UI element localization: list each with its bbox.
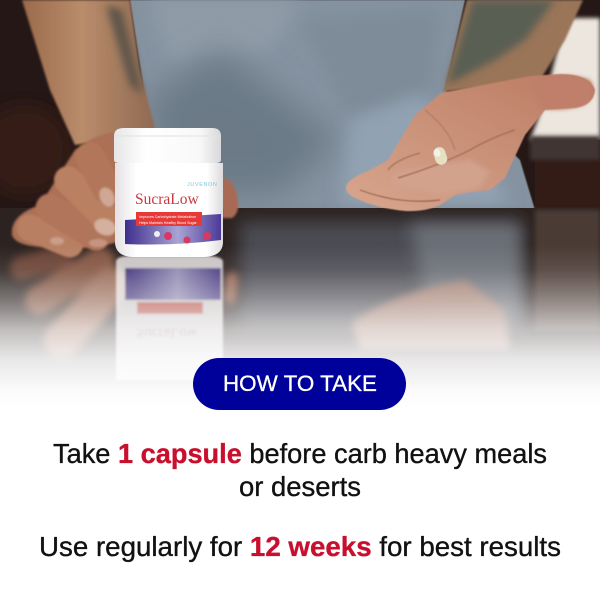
brand text: JUVENON [187, 182, 217, 188]
instruction text: dosage: Take 1 capsule before carb heavy meals [53, 438, 547, 469]
red claim box: Helps Maintain Healthy Blood Sugar [139, 221, 198, 225]
background: dark room [0, 0, 600, 215]
bottle cap [114, 128, 221, 164]
red claim box: Improves Carbohydrate Metabolism [139, 215, 196, 219]
product bottle [114, 128, 223, 257]
product name: SucraLow [135, 191, 200, 208]
white fade [0, 245, 600, 410]
bottle reflection: SucraLow [136, 325, 198, 341]
icon: capsule in palm [432, 146, 449, 166]
left hand fingers [12, 132, 238, 248]
right forearm [443, 0, 583, 92]
shirt [130, 0, 535, 210]
right hand [346, 74, 595, 211]
table [0, 208, 600, 408]
bottle reflection [116, 256, 223, 380]
instruction text: dosage: or deserts [239, 471, 361, 502]
instruction text: dosage [53, 438, 547, 502]
button: how to take [193, 358, 406, 410]
left forearm [22, 0, 155, 145]
label band [125, 214, 221, 244]
button: how to take: HOW TO TAKE [223, 371, 377, 396]
photo: man holding bottle and showing capsule [0, 0, 600, 410]
instruction text: duration: Use regularly for 12 weeks for best results [39, 531, 561, 562]
hand reflections on table [22, 258, 510, 350]
red claim box [136, 212, 202, 226]
bottle body [115, 163, 223, 257]
